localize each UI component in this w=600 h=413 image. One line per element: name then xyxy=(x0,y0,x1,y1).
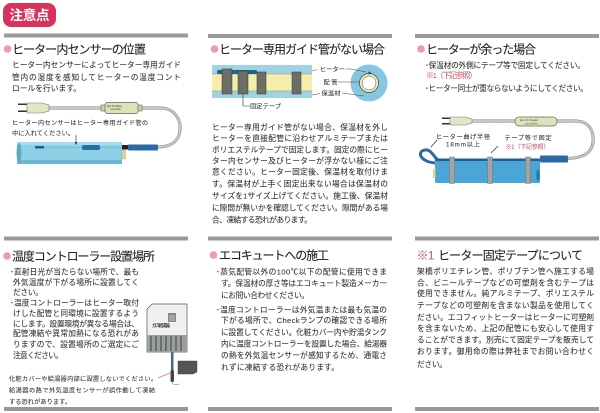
diagram: pipe cross-section with fixing tape: 配管 xyxy=(324,78,338,86)
heading: EcoCute: エコキュートへの施工 xyxy=(219,248,329,262)
text block: fixing tape notes: 使用できません。純アルミテープ、ポリエステル xyxy=(417,288,594,298)
diagram: heater wrapped on pipe with tapes: controller xyxy=(525,122,538,126)
text block: controller location notes: 配管凍結や異常加熱になる恐れがあ xyxy=(13,328,139,338)
diagram: heater in guide pipe with plug and controller xyxy=(16,102,180,164)
callout: fix with tape xyxy=(491,134,552,153)
text block: controller location notes xyxy=(10,266,139,360)
panel: EcoCute installation xyxy=(208,236,392,411)
text block: fixing tape notes: ださい。エコフィットヒーターはヒーターに可塑剤 xyxy=(417,313,594,322)
text block: no guide pipe instructions: 意ください。ヒーター固定後、保温材を取付けま xyxy=(212,166,388,176)
diagram: heater wrapped on pipe with tapes: Eco Fit Heater xyxy=(520,119,538,122)
text block: excess heater instructions xyxy=(425,60,588,93)
callout: do not install inside cover xyxy=(9,375,157,406)
text block: fixing tape notes: おります。御用命の際は弊社までお問い合わせく xyxy=(417,346,594,356)
text block: EcoCute notes: にお問い合わせください。 xyxy=(221,290,309,300)
text block: controller location notes: ･直射日光が当たらない場所で、最も xyxy=(10,266,139,276)
text block: fixing tape notes: ださい。 xyxy=(417,360,447,369)
text block: fixing tape notes: ることができます。別売にて固定テープを販売して xyxy=(417,334,594,344)
text block: no guide pipe instructions: ポリエステルテープで固定します。固定の際にヒー xyxy=(212,144,388,154)
text block: controller location notes: ･温度コントローラーはヒーター取付 xyxy=(10,298,139,308)
text block: controller location notes: にします。設置環境が異なる場合は、 xyxy=(13,318,139,328)
heading: controller location: 温度コントローラー設置場所 xyxy=(12,250,155,264)
panel: heater internal sensor position xyxy=(4,34,188,164)
text block: fixing tape notes xyxy=(417,266,594,369)
heading: sensor position: ヒーター内センサーの位置 xyxy=(12,42,146,56)
text block: sensor description: ヒーター内センサーによってヒーター専用ガイド xyxy=(12,60,181,70)
diagram: pipe cross-section with fixing tape: ヒーター xyxy=(320,66,345,74)
diagram: heater in guide pipe with plug and controller: controller xyxy=(110,108,121,111)
text block: no guide pipe instructions: に隙間が無いかを確認してください。隙間がある場 xyxy=(212,202,388,212)
text block: EcoCute notes: 内に温度コントローラーを設置した場合、給湯器 xyxy=(221,338,387,348)
icon: water heater with sensor xyxy=(147,304,197,384)
text block: no guide pipe instructions: サイズを1サイズ上げてください。施工後、保温材 xyxy=(212,190,388,200)
text block: no guide pipe instructions: ヒーター専用ガイド管がない場合、保温材を外し xyxy=(212,122,388,132)
text block: EcoCute notes: ･温度コントローラーは外気温または最も気温の xyxy=(216,304,387,314)
title badge: 注意点: 注意点 xyxy=(10,7,50,23)
text block: excess heater instructions: ※1（下記参照） xyxy=(426,70,477,80)
text block: controller location notes: 外気温度が下がる場所に設置してく xyxy=(13,277,139,287)
text block: controller location notes: けした配管と同環境に設置するよう xyxy=(13,308,139,318)
diagram: heater in guide pipe with plug and controller: Eco Fit Heater xyxy=(107,105,122,108)
text block: EcoCute notes: に設置してください。化粧カバー内や貯湯タンク xyxy=(221,327,387,337)
text block: fixing tape notes: 合、ビニールテープなどの可塑剤を含むテープは xyxy=(417,278,594,288)
callout: do not install inside cover: 化粧カバーや給湯器内部に設置しないでください。 xyxy=(9,375,157,383)
diagram: pipe cross-section with fixing tape: 固定テープ xyxy=(250,104,282,110)
heading: no guide pipe: ヒーター専用ガイド管がない場合 xyxy=(219,42,385,56)
diagram: pipe cross-section with fixing tape xyxy=(212,64,388,110)
heading: excess heater: ヒーターが余った場合 xyxy=(426,42,536,56)
callout: fix with tape: テープ等で固定 xyxy=(504,134,552,142)
callout: sensor goes in guide pipe: ヒーター内センサーはヒーター専用ガイド管の xyxy=(12,119,148,127)
text block: controller location notes: ださい。 xyxy=(13,288,43,297)
text block: fixing tape notes: を含まないため、上記の配管にも安心して使用す xyxy=(417,323,594,333)
callout: do not install inside cover: する恐れがあります。 xyxy=(9,398,71,406)
text block: controller location notes: 注意ください。 xyxy=(13,350,63,360)
text block: no guide pipe instructions xyxy=(212,122,388,224)
callout: sensor goes in guide pipe: 中に入れてください。 xyxy=(12,130,74,138)
text block: EcoCute notes: ･蒸気配管以外の100℃以下の配管に使用できま xyxy=(216,266,387,276)
callout: bend radius xyxy=(431,133,491,148)
title badge: 注意点 xyxy=(3,3,56,27)
text block: EcoCute notes xyxy=(216,266,387,372)
diagram: heater wrapped on pipe with tapes xyxy=(420,117,593,184)
heading: fixing tape: ヒーター固定テープについて xyxy=(438,248,583,262)
text block: sensor description: ロールを行います。 xyxy=(12,83,81,93)
text block: fixing tape notes: 架橋ポリエチレン管、ポリブテン管へ施工する場 xyxy=(417,266,594,276)
text block: sensor description: 管内の湿度を感知してヒーターの温度コント xyxy=(12,72,181,82)
panel: excess heater xyxy=(415,34,599,184)
text block: excess heater instructions: ･保温材の外側にテープ等で固定してください。 xyxy=(425,60,585,70)
text block: excess heater instructions: ･ヒーター同士が重ならないようにしてください。 xyxy=(425,83,588,93)
text block: controller location notes: りますので、設置場所のご選定にご xyxy=(13,339,139,349)
panel: heater fixing tape note xyxy=(415,236,599,411)
text block: sensor description xyxy=(12,60,181,93)
text block: fixing tape notes: テープなどの可塑剤を含まない製品を使用してく xyxy=(417,300,594,310)
icon: water heater with sensor: ガス給湯器 xyxy=(152,322,170,329)
text block: EcoCute notes: れずに凍結する恐れがあります。 xyxy=(221,362,339,372)
text block: EcoCute notes: す。保温材の厚さ等はエコキュート製造メーカー xyxy=(221,278,387,288)
heading: fixing tape: ※1 xyxy=(416,248,435,262)
diagram: pipe cross-section with fixing tape: 保温材 xyxy=(322,90,340,98)
text block: no guide pipe instructions: ヒーターを直接配管に沿わせアルミテープまたは xyxy=(212,133,388,143)
callout: do not install inside cover: 給湯器の熱で外気温度センサーが誤作動して凍結 xyxy=(9,386,155,394)
callout: bend radius: 18mm以上 xyxy=(446,140,480,148)
text block: no guide pipe instructions: す。保温材が上手く固定出来ない場合は保温材の xyxy=(212,178,388,188)
panel: no dedicated guide pipe xyxy=(208,34,392,224)
text block: no guide pipe instructions: 合、凍結する恐れがあります。 xyxy=(212,214,312,224)
text block: EcoCute notes: 下がる場所で、Checkランプの確認できる場所 xyxy=(221,315,387,325)
panel: temperature controller location xyxy=(3,236,197,411)
text block: EcoCute notes: の熱を外気温センサーが感知するため、通電さ xyxy=(221,350,387,360)
text block: no guide pipe instructions: ター内センサー及びヒーターが浮かない様にご注 xyxy=(212,156,388,166)
callout: fix with tape: ※1（下記参照） xyxy=(506,143,550,151)
callout: bend radius: ヒーター曲げ半径 xyxy=(436,133,491,141)
callout: sensor goes in guide pipe xyxy=(12,119,148,145)
